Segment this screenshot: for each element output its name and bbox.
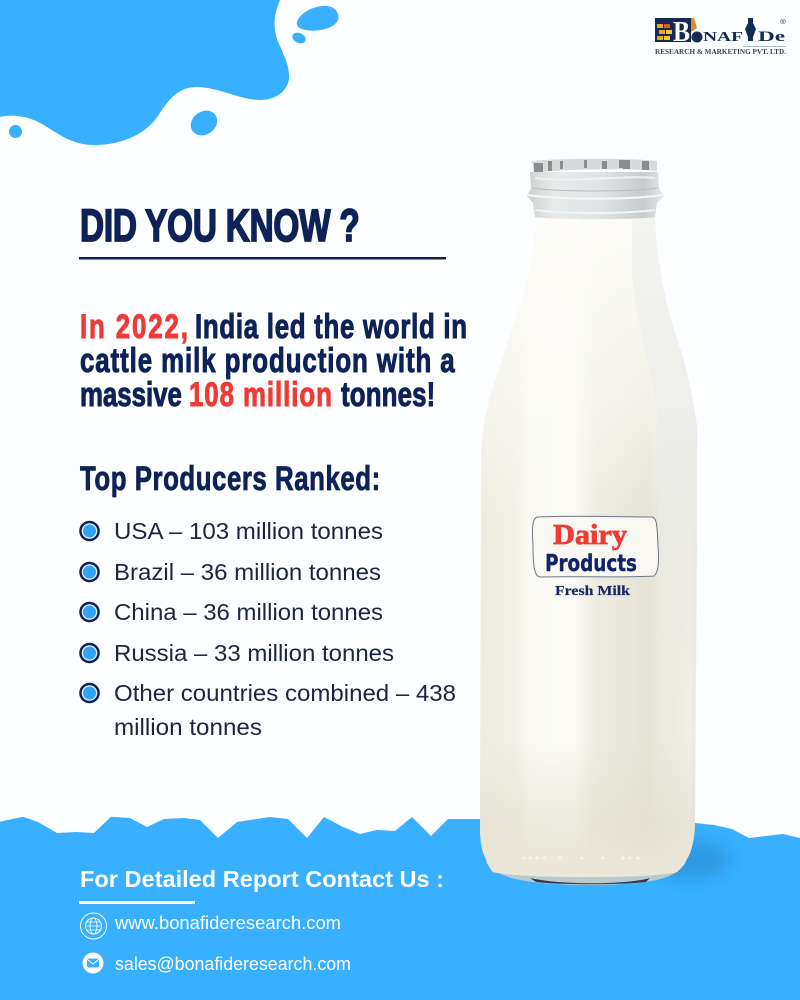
website: www.bonafideresearch.com bbox=[114, 913, 341, 933]
logo bbox=[655, 17, 787, 56]
logo: RESEARCH & MARKETING PVT. LTD. bbox=[655, 48, 786, 56]
bottle embossed dots bbox=[522, 856, 640, 860]
key fact text: cattle milk production with a bbox=[80, 343, 455, 380]
bottle top glow bbox=[481, 214, 658, 520]
bottle foil lid bbox=[532, 159, 657, 173]
top milk splash bbox=[0, 0, 339, 145]
producers list: Brazil – 36 million tonnes bbox=[114, 559, 381, 585]
milk bottle bbox=[480, 159, 697, 885]
bottle glass base bbox=[486, 862, 686, 885]
logo: NAF bbox=[703, 30, 743, 45]
subheading: top producers: Top Producers Ranked: bbox=[80, 461, 380, 498]
producers list: USA – 103 million tonnes bbox=[114, 518, 383, 544]
key fact text bbox=[80, 309, 467, 414]
heading rule bbox=[79, 257, 446, 260]
bottle glass side bbox=[632, 217, 697, 700]
producers list: Other countries combined – 438 bbox=[114, 680, 456, 706]
producers list: million tonnes bbox=[114, 714, 262, 740]
contact heading: For Detailed Report Contact Us : bbox=[80, 866, 444, 892]
label: products: Products bbox=[545, 551, 637, 577]
contact underline bbox=[79, 901, 195, 904]
label: dairy: Dairy bbox=[553, 519, 628, 551]
bottle base tint bbox=[480, 740, 696, 877]
producers list: China – 36 million tonnes bbox=[114, 599, 383, 625]
key fact text: tonnes! bbox=[341, 377, 435, 414]
email: sales@bonafideresearch.com bbox=[115, 954, 351, 974]
bottle neck glass bbox=[527, 172, 664, 219]
heading: did you know: DID YOU KNOW ? bbox=[80, 201, 360, 251]
icon: mail bbox=[82, 952, 104, 974]
logo: B bbox=[673, 17, 690, 48]
logo: ® bbox=[780, 19, 787, 26]
icon: globe bbox=[80, 913, 106, 939]
logo: De bbox=[758, 29, 786, 45]
key fact text: In 2022, bbox=[80, 309, 188, 346]
bottom blue band bbox=[0, 817, 800, 1000]
key fact text: massive bbox=[80, 377, 182, 414]
key fact text: India led the world in bbox=[195, 309, 467, 346]
producers list bbox=[79, 518, 456, 740]
bottle milk body bbox=[480, 214, 697, 877]
label: fresh milk: Fresh Milk bbox=[555, 584, 630, 599]
key fact text: 108 million bbox=[189, 377, 332, 414]
producers list: Russia – 33 million tonnes bbox=[114, 640, 394, 666]
label frame bbox=[532, 516, 659, 577]
bottle shadow bbox=[650, 840, 730, 880]
